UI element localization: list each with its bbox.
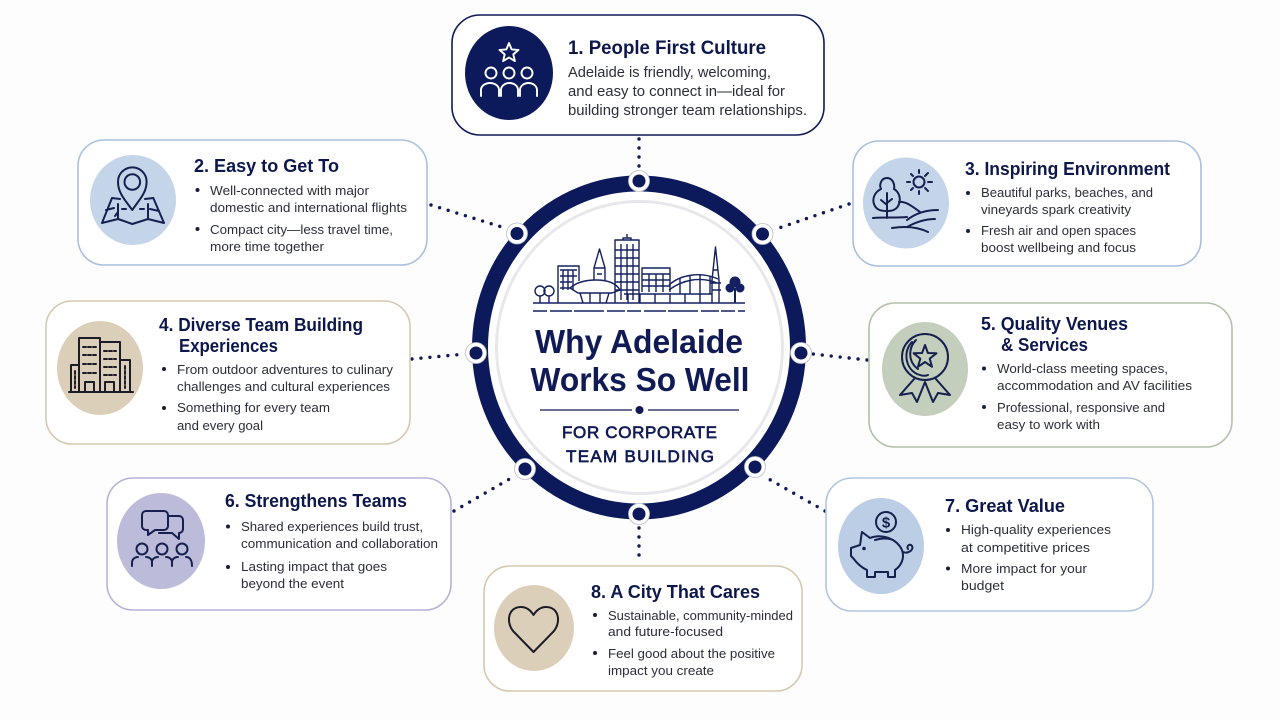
icon: landscape [863,158,949,248]
inner soft ring [496,202,782,494]
bullet list: Fresh air and open spaces [981,223,1136,238]
bullet list: boost wellbeing and focus [981,240,1136,255]
panel 5: Quality Venues & Services [869,303,1232,447]
bullet list [226,519,438,591]
bullet list: and future-focused [608,624,723,639]
icon: piggy bank: $ [882,514,891,532]
bullet list: Well-connected with major [210,183,370,198]
icon: team speech bubbles [117,493,205,589]
heading [159,314,363,356]
heading: 3. Inspiring Environment [965,158,1170,179]
bullet list: Beautiful parks, beaches, and [981,185,1153,200]
title divider [540,406,739,414]
bullet list: domestic and international flights [210,200,407,215]
bullet list [162,362,393,433]
text block: and easy to connect in—ideal for [568,84,785,100]
bullet list [982,361,1192,432]
icon: heart [494,585,574,671]
panel 7: Great Value [826,478,1153,611]
bullet list: more time together [210,239,325,254]
bullet list [593,608,793,678]
bullet list: From outdoor adventures to culinary [177,362,393,377]
heading: 5. Quality Venues [981,313,1128,334]
bullet list: accommodation and AV facilities [997,378,1192,393]
bullet list: communication and collaboration [241,536,438,551]
heading: 4. Diverse Team Building [159,314,363,335]
bullet list: challenges and cultural experiences [177,379,390,394]
bullet list: vineyards spark creativity [981,202,1131,217]
icon: city buildings [57,321,143,415]
bullet list: at competitive prices [961,540,1090,555]
bullet list: Shared experiences build trust, [241,519,423,534]
dotted connectors [412,139,867,561]
bullet list: Something for every team [177,400,330,415]
bullet list: Lasting impact that goes [241,559,387,574]
central hub [466,170,812,524]
title: Works So Well [530,361,750,398]
heading: 1. People First Culture [568,37,766,59]
heading: & Services [1001,334,1088,355]
panel 2: Easy to Get To [78,140,427,265]
bullet list: beyond the event [241,576,344,591]
title [530,323,750,398]
bullet list: impact you create [608,663,714,678]
bullet list: Compact city—less travel time, [210,222,393,237]
illustration: Adelaide skyline [533,234,745,311]
heading [981,313,1128,355]
text block: building stronger team relationships. [568,103,807,119]
heading: 6. Strengthens Teams [225,490,407,511]
bullet list: World-class meeting spaces, [997,361,1168,376]
subtitle: TEAM BUILDING [566,447,714,466]
icon: award rosette [882,322,968,416]
bullet list: Feel good about the positive [608,646,775,661]
panel 4: Diverse Team Building Experiences [46,301,410,444]
heading: 7. Great Value [945,495,1065,516]
heading: Experiences [179,335,278,356]
bullet list: Sustainable, community-minded [608,608,793,623]
bullet list [966,185,1153,255]
subtitle: FOR CORPORATE [562,423,717,442]
bullet list: Professional, responsive and [997,400,1165,415]
title: Why Adelaide [535,323,743,360]
text block: Adelaide is friendly, welcoming, [568,65,771,81]
bullet list: More impact for your [961,561,1088,576]
panel 3: Inspiring Environment [853,141,1201,266]
panel 1: People First Culture [452,15,824,135]
panel 6: Strengthens Teams [107,478,451,610]
bullet list: easy to work with [997,417,1100,432]
icon: people with star [465,26,553,120]
panel 8: A City That Cares [484,566,802,691]
icon: piggy bank [838,498,924,594]
ring nodes [466,170,812,524]
bullet list: and every goal [177,418,263,433]
text block [568,65,807,119]
icon: map pin [90,155,176,245]
navy ring [480,184,798,512]
bullet list: budget [961,578,1004,593]
subtitle [562,423,717,466]
bullet list: High-quality experiences [961,522,1111,537]
heading: 8. A City That Cares [591,581,760,602]
bullet list [196,183,407,254]
bullet list [946,522,1111,593]
heading: 2. Easy to Get To [194,155,339,176]
